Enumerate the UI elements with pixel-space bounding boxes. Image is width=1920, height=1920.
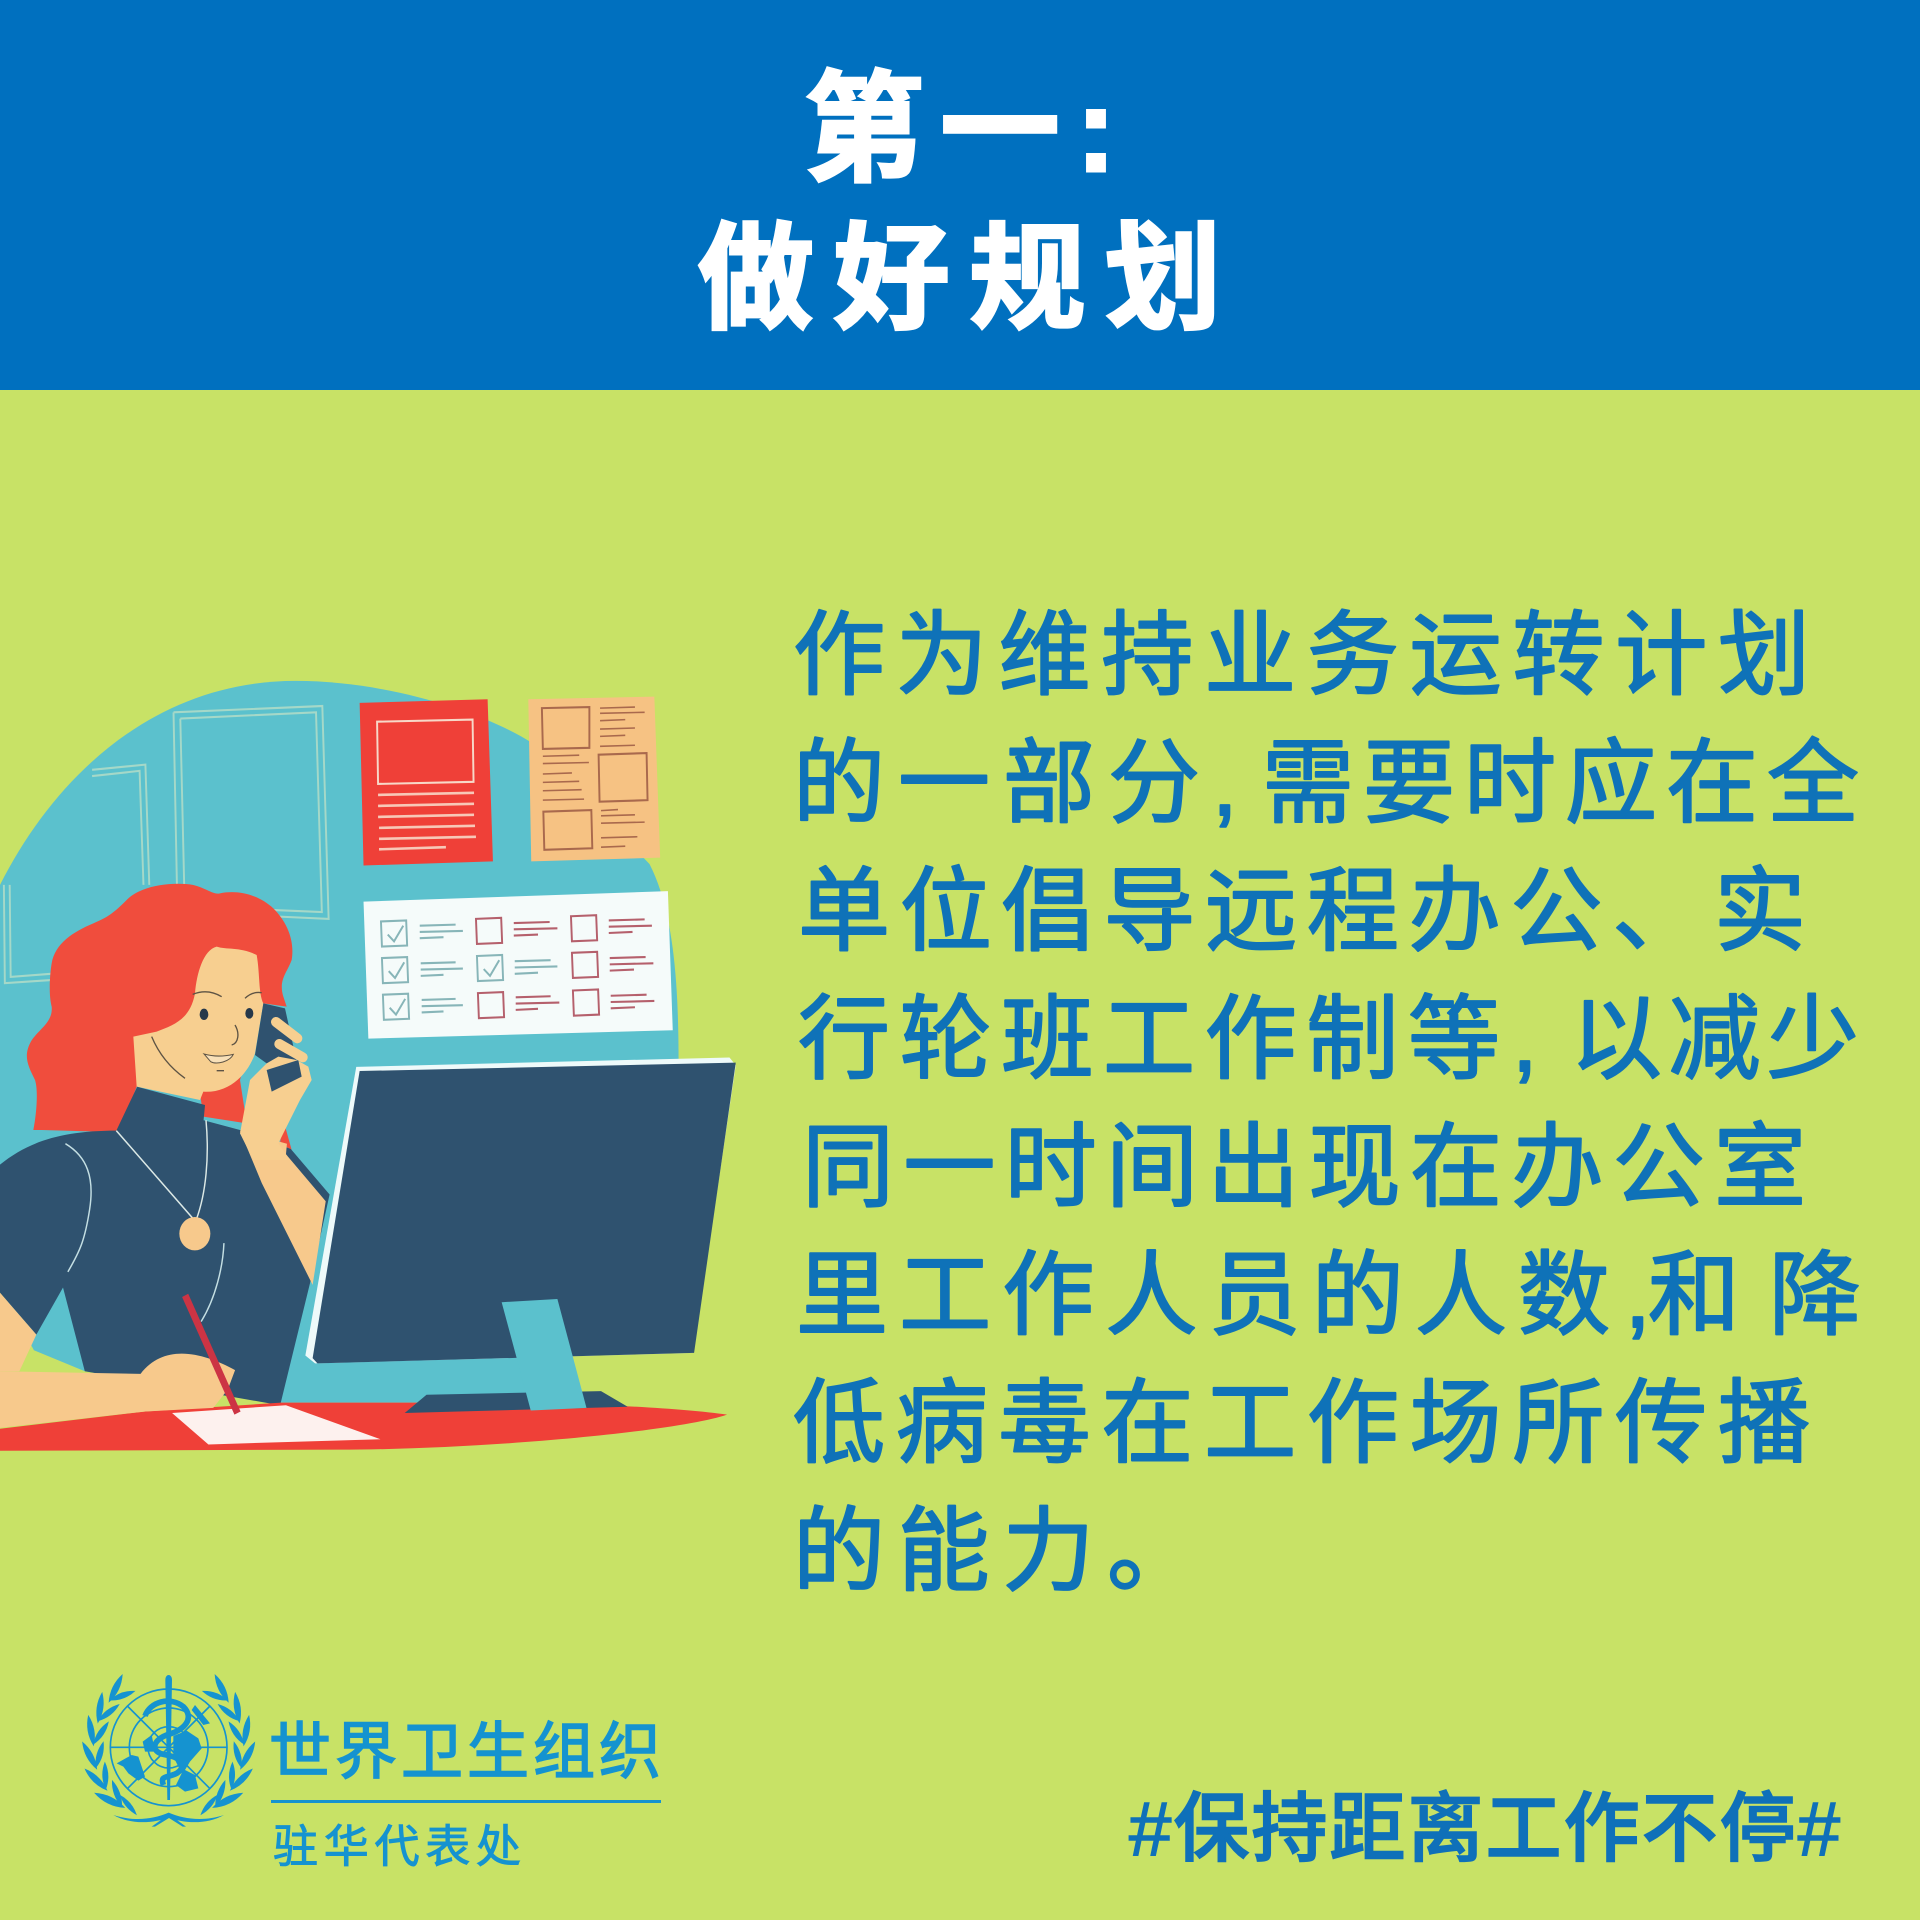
body paragraph <box>793 605 1861 1603</box>
organisation name: 世界卫生组织 <box>269 1718 661 1787</box>
checklist <box>364 891 673 1039</box>
raised forearm <box>240 1131 326 1285</box>
body paragraph: 行轮班工作制等 <box>798 989 1500 1091</box>
emblem <box>82 1674 256 1827</box>
torso <box>0 1087 330 1405</box>
title line 1: 第一: <box>804 63 1116 197</box>
body paragraph: 需要时应在全 <box>1262 733 1859 835</box>
hashtag: #保持距离工作不停# <box>1129 1787 1840 1872</box>
WHO logo <box>79 1672 661 1872</box>
body paragraph: , <box>1625 1245 1651 1347</box>
body paragraph: 以减少 <box>1570 989 1859 1091</box>
body paragraph: , <box>1512 989 1538 1091</box>
red poster <box>360 699 493 866</box>
body paragraph: , <box>1212 733 1238 835</box>
phone and hand <box>240 1003 312 1156</box>
body paragraph: 低病毒在工作场所传播 <box>793 1373 1810 1475</box>
title line 2: 做好规划 <box>698 214 1221 344</box>
monitor <box>305 1057 736 1413</box>
body paragraph: 同一时间出现在办公室 <box>802 1117 1806 1219</box>
pencil <box>185 1295 238 1413</box>
body paragraph: 的能力。 <box>793 1501 1199 1603</box>
body paragraph: 和降 <box>1648 1245 1861 1347</box>
illustration: woman on phone at desk <box>0 681 736 1451</box>
head: hair and face <box>26 884 292 1150</box>
header band <box>0 0 1920 390</box>
wall frames <box>4 706 329 983</box>
orange poster <box>528 697 660 861</box>
office name: 驻华代表处 <box>273 1821 521 1872</box>
body paragraph: 的一部分 <box>793 733 1200 835</box>
face <box>133 947 263 1100</box>
body paragraph: 里工作人员的人数 <box>796 1245 1610 1347</box>
desk <box>0 1403 727 1451</box>
necklace <box>65 1120 224 1322</box>
forearm and hand <box>0 1354 235 1428</box>
hair <box>27 884 292 1150</box>
body paragraph: 作为维持业务运转计划 <box>793 605 1810 707</box>
sheet of paper <box>172 1405 380 1444</box>
wall circle <box>0 681 679 1403</box>
left upper arm <box>0 1293 36 1371</box>
body paragraph: 单位倡导远程办公、实 <box>798 861 1806 963</box>
